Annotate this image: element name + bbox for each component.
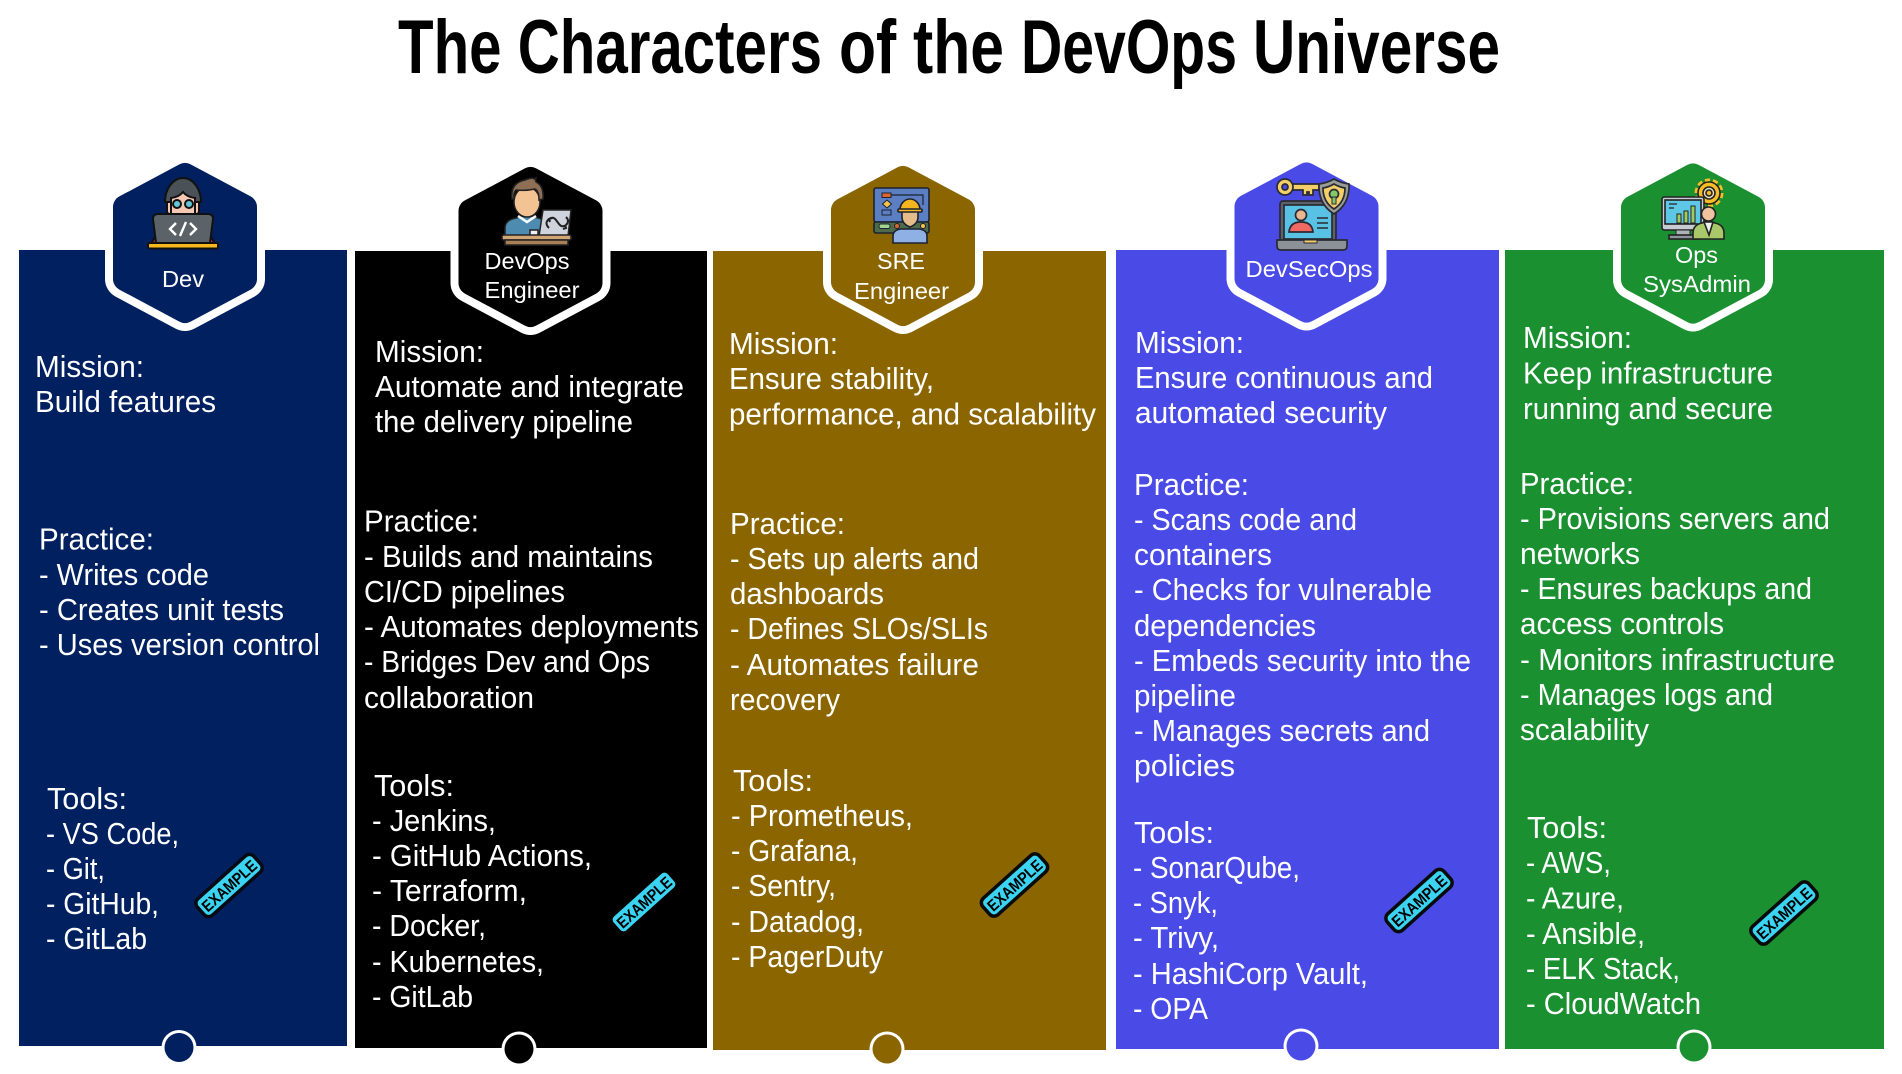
- tools text: - Ansible,: [1526, 916, 1645, 951]
- tools text: - PagerDuty: [731, 939, 883, 974]
- panel: DevOps Engineer: [355, 178, 707, 1066]
- mission text: Ensure continuous and: [1135, 360, 1433, 395]
- tools text: - Terraform,: [372, 873, 527, 908]
- practice text: [39, 522, 320, 662]
- panel background: [1505, 250, 1884, 1049]
- example badge: EXAMPLE: [985, 857, 1047, 915]
- tools text: Tools:: [1134, 815, 1214, 850]
- practice text: Practice:: [1134, 467, 1249, 502]
- icon: developer at laptop: [148, 178, 218, 248]
- tools text: [1133, 815, 1368, 1026]
- hexagon badge: [470, 179, 590, 315]
- practice text: containers: [1134, 537, 1272, 572]
- panel: DevSecOps: [1116, 174, 1499, 1064]
- role label: [1643, 242, 1751, 297]
- role label: Ops: [1675, 242, 1718, 268]
- tools text: - GitHub,: [46, 886, 159, 921]
- tools text: - Git,: [46, 851, 105, 886]
- title: [398, 5, 1500, 90]
- role label: DevOps: [484, 248, 570, 274]
- role label: DevSecOps: [1246, 256, 1372, 282]
- practice text: - Automates deployments: [364, 609, 699, 644]
- tools text: - OPA: [1133, 991, 1208, 1026]
- tools text: - Datadog,: [731, 904, 864, 939]
- tools text: - AWS,: [1526, 845, 1611, 880]
- practice text: Practice:: [730, 506, 845, 541]
- role label: [854, 248, 949, 304]
- tools text: - ELK Stack,: [1526, 951, 1680, 986]
- bottom dot: [1676, 1030, 1712, 1064]
- tools text: - Grafana,: [731, 833, 858, 868]
- practice text: - Scans code and: [1134, 502, 1357, 537]
- tools text: - VS Code,: [46, 816, 179, 851]
- practice text: CI/CD pipelines: [364, 574, 565, 609]
- practice text: access controls: [1520, 606, 1724, 641]
- mission text: [375, 334, 684, 439]
- mission text: [1523, 320, 1773, 426]
- practice text: - Uses version control: [39, 627, 320, 662]
- tools text: - Prometheus,: [731, 798, 913, 833]
- practice text: - Embeds security into the: [1134, 643, 1471, 678]
- mission text: performance, and scalability: [729, 396, 1096, 432]
- practice text: - Writes code: [39, 557, 209, 592]
- practice text: Practice:: [1520, 466, 1634, 501]
- panel background: [1116, 250, 1499, 1049]
- tools text: [46, 781, 179, 956]
- mission text: Automate and integrate: [375, 369, 684, 404]
- mission text: running and secure: [1523, 391, 1773, 426]
- tools text: Tools:: [47, 781, 127, 816]
- practice text: [364, 504, 699, 715]
- mission text: Mission:: [35, 349, 144, 384]
- bottom dot: [870, 1032, 904, 1066]
- practice text: - Monitors infrastructure: [1520, 642, 1835, 677]
- panel background: [355, 251, 707, 1048]
- practice text: Practice:: [39, 522, 154, 556]
- practice text: [730, 506, 988, 717]
- tools text: [372, 768, 592, 1014]
- icon: engineer with laptop: [502, 178, 571, 245]
- tools text: - Snyk,: [1133, 885, 1218, 920]
- tools text: Tools:: [1527, 810, 1607, 845]
- panel: Ops SysAdmin: [1505, 176, 1884, 1064]
- mission text: Keep infrastructure: [1523, 356, 1773, 390]
- hexagon badge: [1633, 176, 1753, 312]
- practice text: - Defines SLOs/SLIs: [730, 611, 988, 646]
- role label: SRE: [877, 248, 925, 274]
- mission text: automated security: [1135, 395, 1387, 430]
- bottom dot: [162, 1030, 196, 1065]
- icon: key, shield and secure laptop: [1277, 179, 1349, 250]
- title: The Characters: [398, 5, 822, 90]
- tools text: - SonarQube,: [1133, 850, 1300, 885]
- example badge: EXAMPLE: [1754, 885, 1816, 943]
- mission text: [35, 349, 216, 419]
- icon: site reliability engineer at control panel: [874, 188, 929, 243]
- practice text: Practice:: [364, 504, 479, 538]
- tools text: - GitLab: [372, 979, 473, 1014]
- mission text: [1135, 325, 1433, 430]
- tools text: - Trivy,: [1133, 920, 1219, 955]
- tools text: - Kubernetes,: [372, 944, 544, 979]
- tools text: Tools:: [374, 768, 454, 803]
- practice text: dashboards: [730, 576, 884, 611]
- practice text: policies: [1134, 748, 1235, 783]
- tools text: - HashiCorp Vault,: [1133, 956, 1368, 991]
- mission text: Mission:: [375, 334, 484, 369]
- practice text: - Builds and maintains: [364, 539, 653, 574]
- panel background: [19, 250, 347, 1046]
- practice text: - Manages secrets and: [1134, 713, 1430, 748]
- tools text: [731, 763, 913, 974]
- panel: SRE Engineer: [713, 178, 1106, 1066]
- hexagon badge: [843, 178, 963, 314]
- role label: Engineer: [854, 278, 949, 304]
- bottom dot: [502, 1032, 536, 1066]
- mission text: Mission:: [729, 326, 838, 361]
- tools text: - Azure,: [1526, 880, 1624, 916]
- role label: Dev: [162, 266, 205, 292]
- practice text: networks: [1520, 536, 1640, 571]
- practice text: - Provisions servers and: [1520, 501, 1830, 536]
- practice text: - Bridges Dev and Ops: [364, 644, 650, 679]
- tools text: - GitHub Actions,: [372, 838, 592, 873]
- example badge: EXAMPLE: [199, 857, 261, 916]
- practice text: - Manages logs and: [1520, 677, 1773, 712]
- example badge: EXAMPLE: [1389, 872, 1451, 931]
- tools text: - Docker,: [372, 908, 486, 943]
- practice text: dependencies: [1134, 608, 1316, 643]
- practice text: - Automates failure: [730, 647, 979, 682]
- hexagon badge: [1246, 174, 1366, 310]
- tools text: - GitLab: [46, 921, 147, 956]
- practice text: pipeline: [1134, 678, 1236, 713]
- mission text: Build features: [35, 384, 216, 419]
- icon: sysadmin with monitor and gear: [1662, 180, 1724, 239]
- hexagon badge: [125, 175, 245, 311]
- role label: [484, 248, 580, 303]
- practice text: recovery: [730, 682, 840, 717]
- panel background: [713, 251, 1106, 1050]
- bottom dot: [1284, 1028, 1318, 1064]
- practice text: - Ensures backups and: [1520, 571, 1812, 606]
- example badge: EXAMPLE: [614, 874, 676, 932]
- tools text: - Sentry,: [731, 868, 836, 903]
- tools text: - CloudWatch: [1526, 986, 1701, 1021]
- mission text: Mission:: [1135, 325, 1244, 360]
- practice text: scalability: [1520, 712, 1649, 747]
- role label: Engineer: [484, 277, 580, 303]
- tools text: [1526, 810, 1701, 1021]
- practice text: [1520, 466, 1835, 747]
- mission text: [729, 326, 1096, 432]
- role label: SysAdmin: [1643, 271, 1751, 297]
- panel: Dev: [19, 175, 347, 1065]
- title: DevOps: [1021, 5, 1237, 90]
- mission text: Mission:: [1523, 320, 1632, 355]
- practice text: - Creates unit tests: [39, 592, 284, 627]
- practice text: [1134, 467, 1471, 783]
- practice text: collaboration: [364, 680, 534, 715]
- tools text: - Jenkins,: [372, 803, 496, 838]
- practice text: - Sets up alerts and: [730, 541, 979, 576]
- practice text: - Checks for vulnerable: [1134, 572, 1432, 607]
- mission text: Ensure stability,: [729, 361, 934, 396]
- tools text: Tools:: [733, 763, 813, 798]
- title: of the: [839, 5, 1004, 90]
- title: Universe: [1253, 5, 1500, 90]
- mission text: the delivery pipeline: [375, 404, 633, 439]
